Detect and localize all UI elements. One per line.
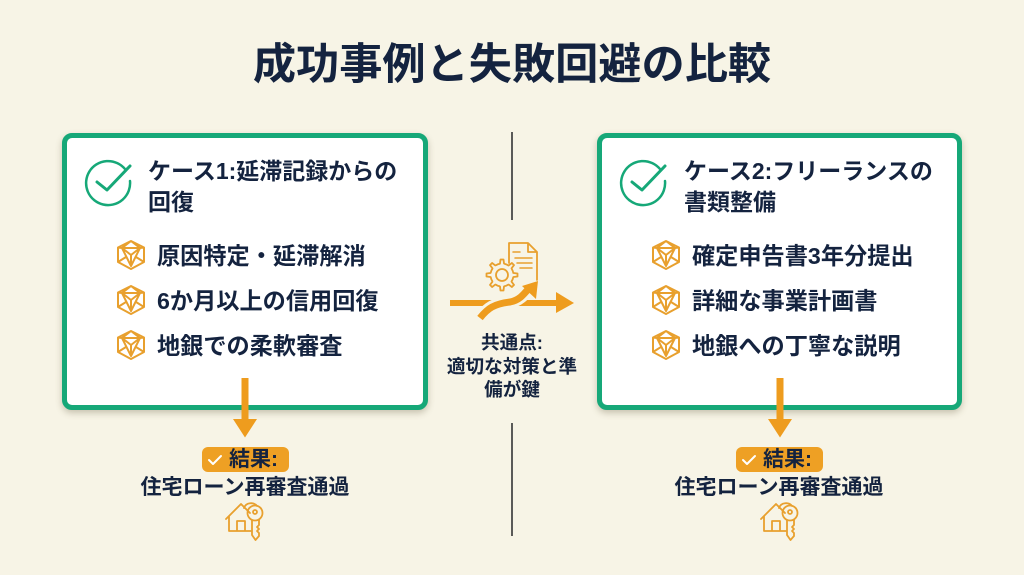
item: 地銀での柔軟審査 (157, 333, 342, 359)
item: 原因特定・延滞解消 (157, 243, 366, 269)
result text 1: 住宅ローン再審査通過 (141, 476, 349, 499)
badge label: 結果: (229, 448, 278, 471)
divider top (511, 132, 513, 220)
heading: 回復 (148, 189, 194, 215)
icon: gem 6 (652, 330, 680, 360)
badge label: 結果: (763, 448, 812, 471)
icon: house and key 1 (225, 502, 264, 541)
arrow: case 2 down (768, 378, 792, 438)
result badge 2 (736, 447, 823, 472)
icon: gem 2 (117, 285, 145, 315)
panel: case 1 (62, 133, 428, 410)
icon: gem 4 (652, 240, 680, 270)
center text: 共通点: (481, 332, 543, 353)
divider bottom (511, 423, 513, 536)
center flow graphic (450, 242, 574, 320)
heading: ケース1:延滞記録からの (148, 158, 397, 184)
icon: check circle (84, 160, 132, 206)
result badge 1 (202, 447, 289, 472)
heading (148, 158, 397, 215)
heading (684, 158, 933, 215)
center text: 適切な対策と準 (447, 356, 577, 376)
icon: gem 3 (117, 330, 145, 360)
item: 詳細な事業計画書 (692, 288, 878, 314)
icon: check circle (620, 160, 667, 206)
result text 2: 住宅ローン再審査通過 (675, 476, 883, 499)
item: 6か月以上の信用回復 (157, 288, 379, 314)
center text (447, 332, 577, 400)
icon: gem 5 (652, 285, 680, 315)
heading: 書類整備 (684, 189, 776, 215)
icon: house and key 2 (760, 502, 798, 541)
arrow: case 1 down (233, 378, 257, 438)
item: 地銀への丁寧な説明 (692, 333, 901, 359)
icon: badge check (208, 455, 222, 465)
center text: 備が鍵 (484, 379, 540, 400)
icon: gear (486, 260, 518, 290)
item: 確定申告書3年分提出 (692, 243, 914, 269)
icon: gem 1 (117, 240, 145, 270)
icon: badge check (742, 455, 756, 465)
heading: ケース2:フリーランスの (684, 158, 933, 184)
panel: case 2 (597, 133, 962, 410)
arrow: horizontal (450, 292, 574, 313)
arrow: rising (480, 281, 538, 318)
title: 成功事例と失敗回避の比較 (253, 41, 771, 89)
icon: document (509, 243, 537, 280)
